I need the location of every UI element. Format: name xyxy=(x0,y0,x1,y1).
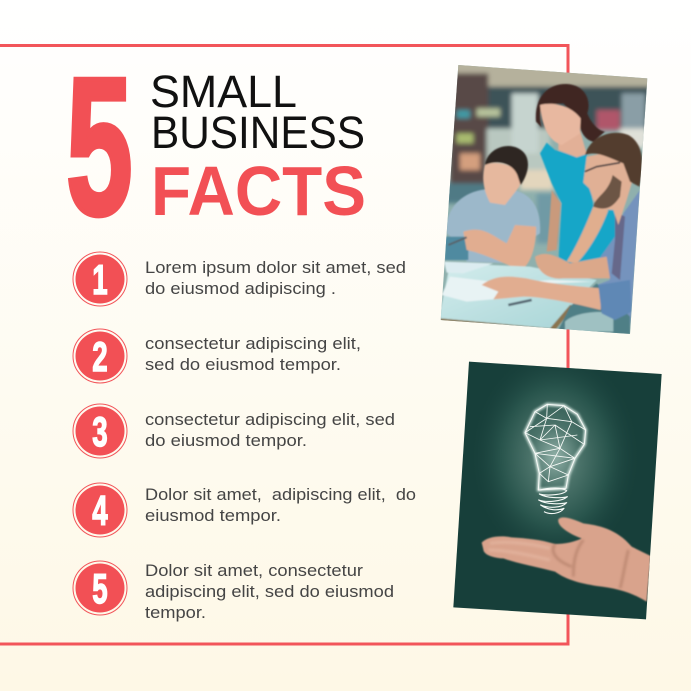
glow xyxy=(488,365,621,542)
fact 2 xyxy=(73,329,361,383)
fact 5: 5 xyxy=(92,565,108,612)
fact 1: do eiusmod adipiscing . xyxy=(145,280,336,298)
fact 5: tempor. xyxy=(145,604,206,622)
woman hair xyxy=(536,84,605,142)
icon: open hand xyxy=(482,517,651,602)
fact 2: consectetur adipiscing elit, xyxy=(145,335,361,353)
fact 4 xyxy=(73,483,416,537)
big number 5: 5 xyxy=(66,38,133,256)
red frame xyxy=(0,46,568,644)
fact 2: 2 xyxy=(92,333,108,380)
icon: wireframe bulb xyxy=(525,404,586,514)
title: FACTS xyxy=(151,152,366,230)
fact 1: 1 xyxy=(92,256,108,303)
fact 3: 3 xyxy=(92,408,108,455)
fact 1: Lorem ipsum dolor sit amet, sed xyxy=(145,259,406,277)
woman face xyxy=(540,104,581,145)
man left shirt xyxy=(447,189,540,263)
woman dress xyxy=(540,143,615,263)
laptop and papers xyxy=(442,277,593,302)
woman arm xyxy=(547,190,561,252)
table xyxy=(440,263,597,328)
fact 3: do eiusmod tempor. xyxy=(145,432,307,450)
right man shirt xyxy=(597,190,640,333)
title: SMALL xyxy=(150,66,297,117)
right man head xyxy=(583,150,632,225)
photo: glowing light bulb over a hand xyxy=(453,350,662,619)
title: BUSINESS xyxy=(151,107,365,158)
fact 4: 4 xyxy=(92,487,108,534)
fact 5: adipiscing elit, sed do eiusmod xyxy=(145,583,394,601)
fact 3 xyxy=(73,404,395,458)
photo: team at a table xyxy=(440,65,648,334)
fact 5: Dolor sit amet, consectetur xyxy=(145,562,364,580)
fact 1 xyxy=(73,252,406,306)
fact 2: sed do eiusmod tempor. xyxy=(145,356,341,374)
fact 4: Dolor sit amet, adipiscing elit, do xyxy=(145,486,416,504)
woman neck xyxy=(558,130,587,157)
right man arms xyxy=(535,254,610,279)
title xyxy=(150,66,366,230)
man left arm and pen xyxy=(463,225,536,270)
man left head xyxy=(483,163,522,205)
fact 3: consectetur adipiscing elit, sed xyxy=(145,411,395,429)
fact 5 xyxy=(73,561,394,622)
fact 4: eiusmod tempor. xyxy=(145,507,281,525)
